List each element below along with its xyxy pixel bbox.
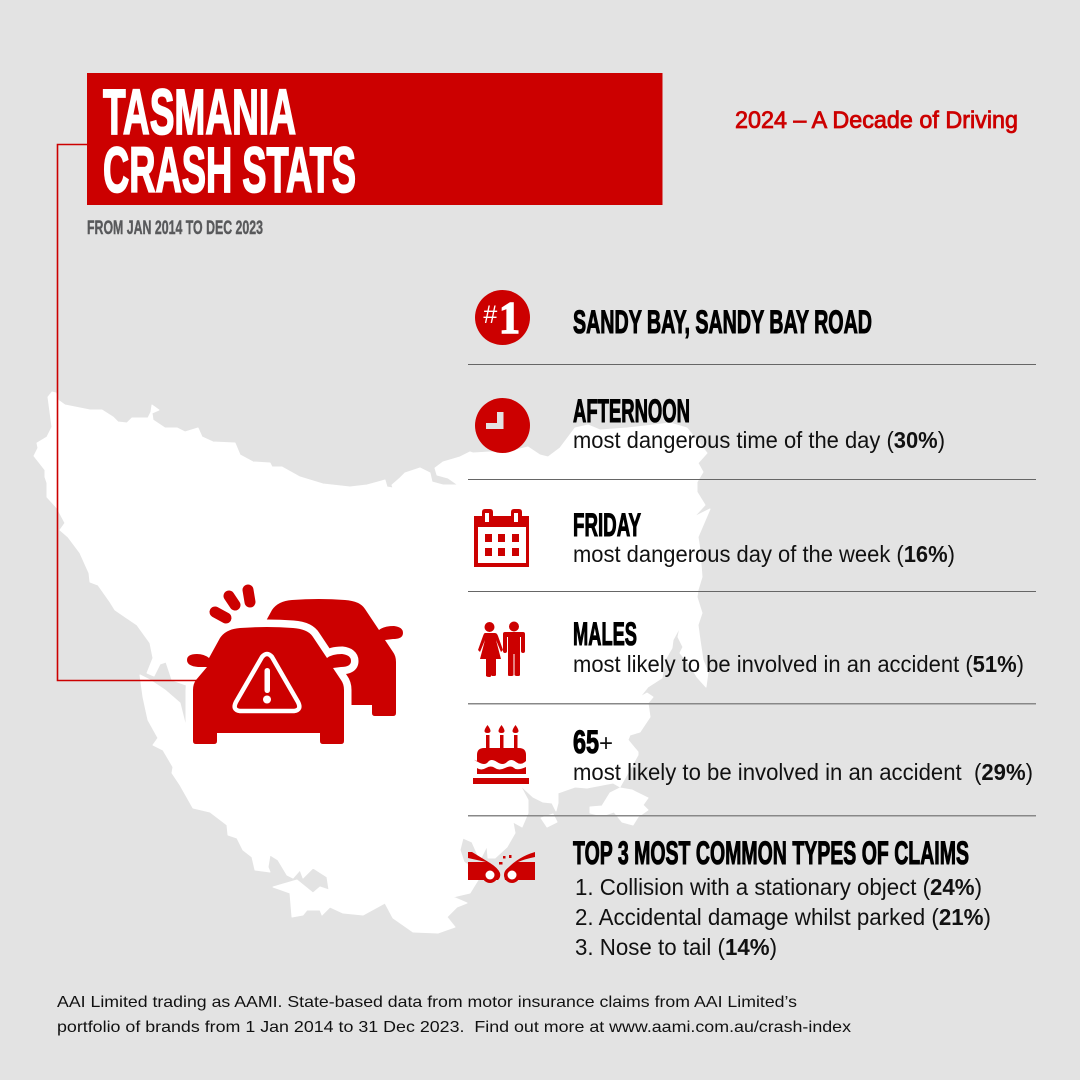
text: gender detail: most likely to be involved in an accident (51%) — [573, 651, 1024, 677]
footer note: portfolio of brands from 1 Jan 2014 to 31 Dec 2023. Find out more at www.aami.com.au/crash-index — [57, 1019, 851, 1036]
row: top location — [475, 290, 872, 345]
row: age — [473, 724, 1033, 785]
icon: number one badge: # — [483, 301, 498, 329]
dividers — [468, 364, 1036, 816]
text: day detail: most dangerous day of the week (16%) — [573, 541, 955, 567]
footer note — [57, 994, 851, 1036]
front car — [187, 627, 351, 744]
text: claim two: 2. Accidental damage whilst parked (21%) — [575, 904, 991, 930]
title block — [87, 73, 662, 206]
heading: friday: FRIDAY — [573, 507, 641, 543]
impact marks — [215, 590, 250, 618]
row: gender — [478, 616, 1024, 677]
row: claim types — [468, 835, 991, 960]
icon: clock — [475, 398, 530, 453]
icon: woman and man — [478, 622, 525, 677]
plus sign: + — [599, 730, 613, 757]
text: claim three: 3. Nose to tail (14%) — [575, 934, 777, 960]
row: day of week — [474, 507, 955, 567]
warning triangle — [235, 654, 299, 711]
icon: crashed cars with warning sign — [58, 144, 403, 744]
icon: birthday cake — [473, 725, 529, 784]
icon: calendar — [474, 509, 529, 567]
icon: number one badge — [475, 290, 530, 345]
back car — [239, 599, 403, 716]
heading: location: SANDY BAY, SANDY BAY ROAD — [573, 304, 872, 340]
campaign tagline: 2024 – A Decade of Driving — [735, 107, 1018, 134]
text: claim one: 1. Collision with a stationary object (24%) — [575, 874, 982, 900]
exclamation mark — [263, 668, 271, 704]
row: time of day — [475, 393, 945, 453]
heading: afternoon: AFTERNOON — [573, 393, 690, 429]
icon: number one badge: 1 — [499, 293, 520, 343]
title block: CRASH STATS — [103, 134, 356, 206]
text: age detail: most likely to be involved in an accident (29%) — [573, 759, 1033, 785]
title block: TASMANIA — [103, 76, 296, 148]
map: Tasmania silhouette — [34, 392, 710, 933]
heading: males: MALES — [573, 616, 637, 652]
date range subtitle: FROM JAN 2014 TO DEC 2023 — [87, 218, 263, 239]
front car white outline — [187, 627, 351, 744]
footer note: AAI Limited trading as AAMI. State-based data from motor insurance claims from AAI Limited’s — [57, 994, 797, 1011]
heading: age group: 65 — [573, 724, 599, 760]
text: time detail: most dangerous time of the day (30%) — [573, 427, 945, 453]
icon: head-on collision — [468, 852, 535, 883]
connector line: header to car — [58, 144, 200, 680]
